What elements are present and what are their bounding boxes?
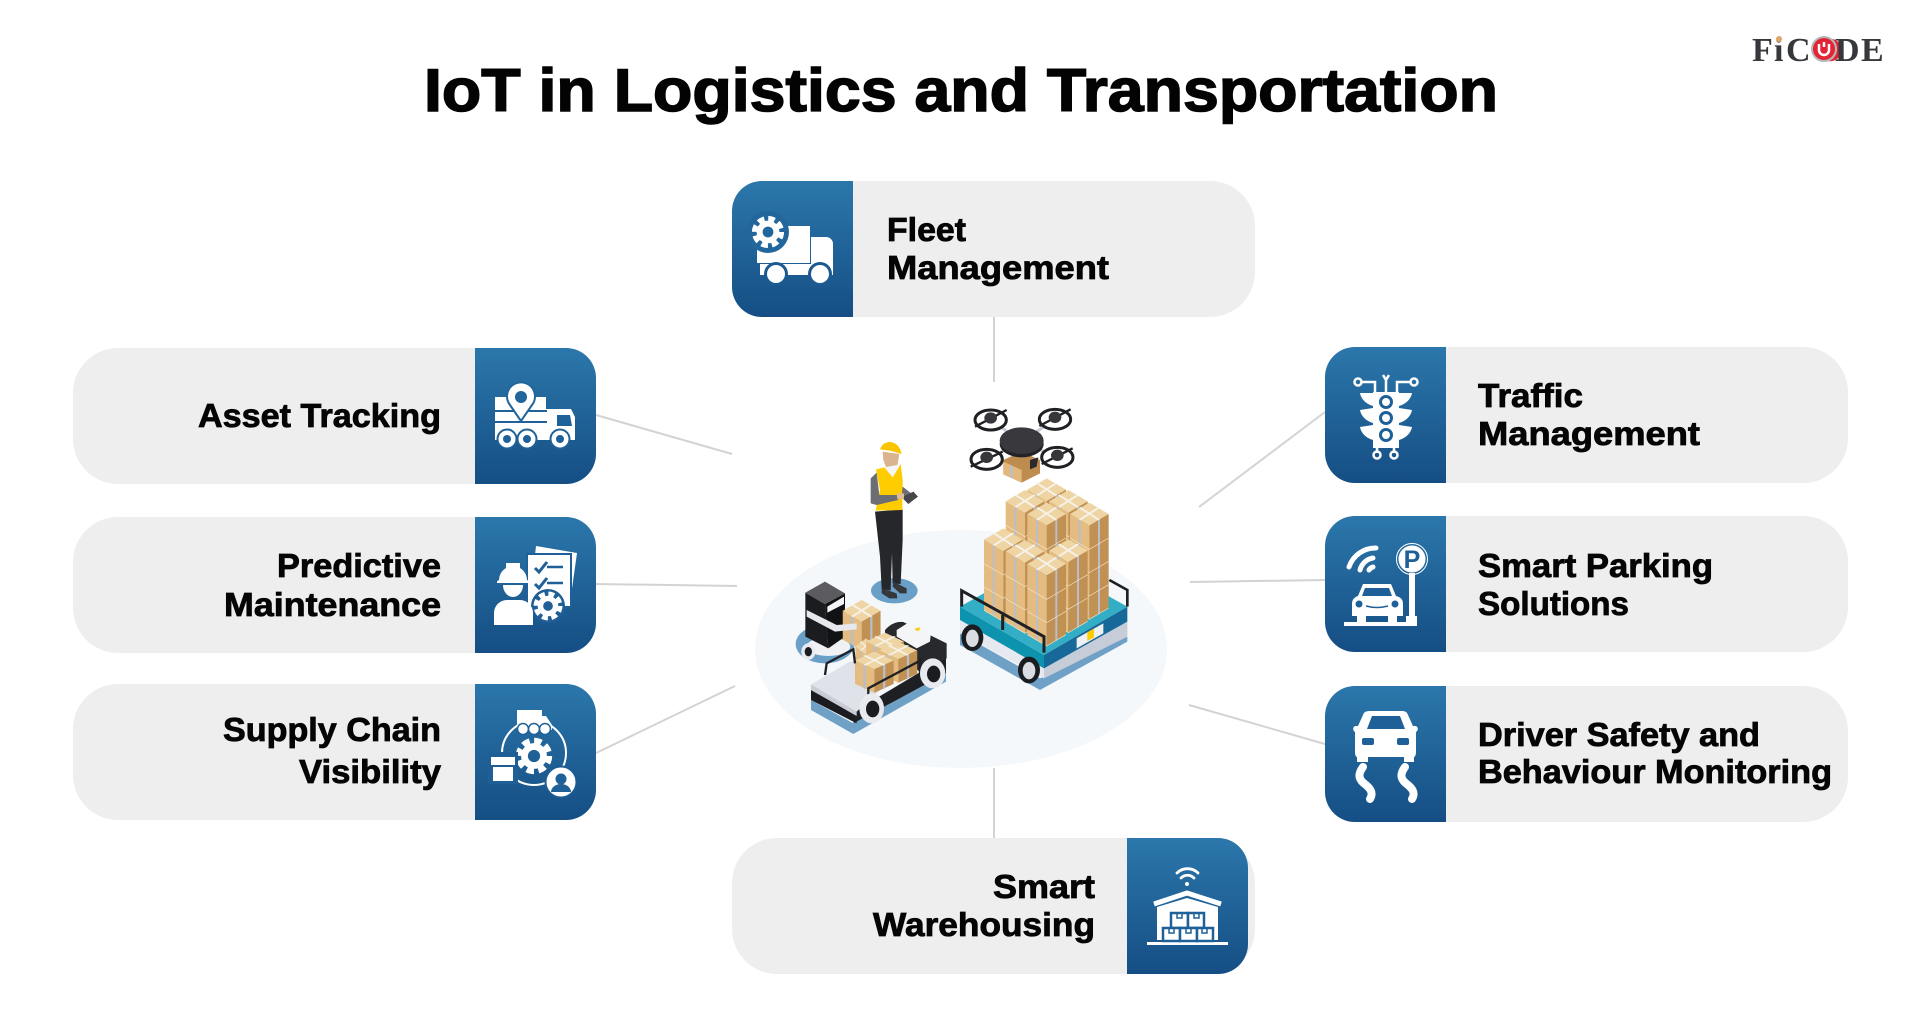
icon: supply chain cycle (488, 710, 576, 798)
label: Asset Tracking (198, 397, 441, 434)
label: Driver Safety and (1478, 716, 1760, 753)
panel: smart warehousing (732, 838, 1255, 974)
icon: car skidding (1353, 711, 1418, 799)
label: Predictive (277, 547, 441, 584)
panel: asset tracking (73, 348, 596, 484)
central illustration (755, 409, 1167, 768)
stacked boxes (984, 478, 1109, 646)
panel: fleet management (732, 181, 1255, 317)
panel: traffic management (1325, 347, 1848, 483)
label (223, 711, 442, 790)
label: Maintenance (224, 586, 441, 623)
label: Traffic (1478, 377, 1583, 414)
icon: truck with location pin (495, 382, 575, 448)
title: IoT in Logistics and Transportation (424, 57, 1498, 124)
logo: FiCODE: FiCODE (1752, 32, 1884, 69)
label: Management (887, 249, 1109, 286)
icon: car at parking sign (1344, 544, 1428, 626)
panel: driver safety and behaviour monitoring (1325, 686, 1848, 822)
front rail (962, 591, 1044, 653)
small cart (807, 600, 947, 734)
label (1478, 377, 1700, 452)
label: Supply Chain (223, 711, 441, 748)
label (873, 868, 1095, 943)
label: Visibility (299, 753, 442, 790)
label (1478, 547, 1713, 622)
label: Solutions (1478, 585, 1629, 622)
connector lines (596, 317, 1325, 838)
icon: worker with checklist (494, 546, 577, 625)
worker (871, 442, 918, 603)
icon: truck with gear (747, 211, 833, 286)
label: Management (1478, 415, 1700, 452)
label: Warehousing (873, 906, 1095, 943)
label: Fleet (887, 211, 966, 248)
robot arm unit (796, 582, 854, 663)
label (1478, 716, 1832, 790)
label (224, 547, 441, 623)
panel: predictive maintenance (73, 517, 596, 653)
large cart (960, 560, 1127, 690)
label: Smart Parking (1478, 547, 1713, 584)
panel: supply chain visibility (73, 684, 596, 820)
icon: car at parking sign: P (1404, 546, 1420, 574)
drone (971, 409, 1073, 483)
panel: smart parking solutions (1325, 516, 1848, 652)
label: Smart (993, 868, 1095, 905)
floor ellipse (755, 530, 1167, 768)
label (887, 211, 1109, 286)
icon: connected warehouse (1147, 869, 1228, 945)
label: Behaviour Monitoring (1478, 753, 1832, 790)
icon: smart traffic light (1354, 375, 1418, 458)
